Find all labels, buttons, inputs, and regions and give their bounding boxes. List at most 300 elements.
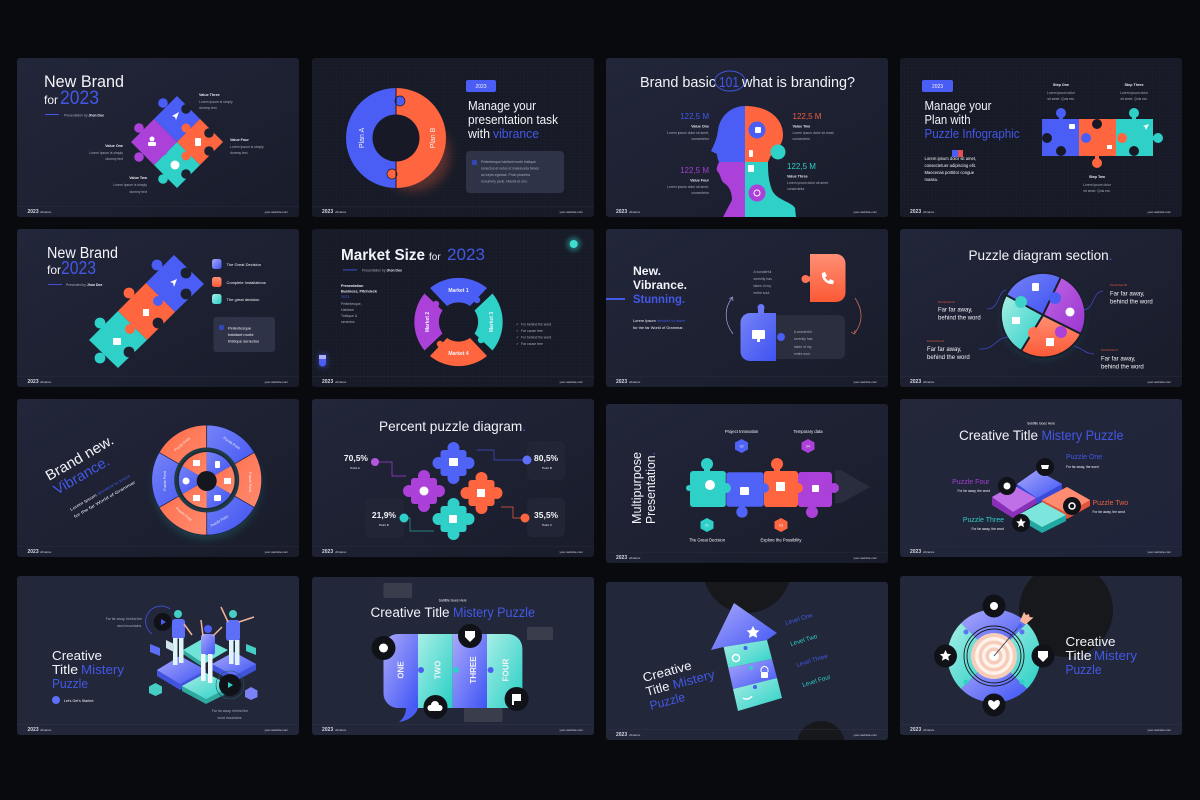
hexagon badges: 02 xyxy=(740,444,744,448)
rotated title: Vibrance. xyxy=(51,454,113,498)
title: what is branding? xyxy=(741,74,855,91)
connectors xyxy=(375,450,527,531)
footer: 2023 xyxy=(322,379,333,385)
checklist: For behind the word xyxy=(521,336,551,340)
callouts: Puzzle Point C xyxy=(1101,348,1118,352)
blue tag xyxy=(318,353,328,368)
title: for xyxy=(44,93,58,107)
text panel: Pellentesque xyxy=(228,326,252,330)
footer xyxy=(900,724,1182,733)
values: 122,5 M xyxy=(792,112,822,121)
title: Title xyxy=(52,663,78,677)
orange piece text: entire soul. xyxy=(754,291,770,295)
footer: 2023 xyxy=(322,549,333,555)
ring puzzle: Plan A xyxy=(359,128,366,148)
body text: for the far World of Grammar. xyxy=(633,325,684,330)
footer: vibrance xyxy=(629,380,641,384)
heading: Stunning. xyxy=(633,292,685,306)
step labels xyxy=(1047,83,1149,193)
checklist: ✓ xyxy=(516,342,519,346)
heading: Manage your xyxy=(924,98,992,113)
callouts: Far far away, xyxy=(927,347,962,353)
stats: Point B xyxy=(542,466,552,470)
callouts: Puzzle Point B xyxy=(1110,283,1127,287)
values: Lorem ipsum dolor sit amet, xyxy=(667,185,709,189)
footer: vibrance xyxy=(40,550,52,554)
market ring: Market 2 xyxy=(425,312,431,332)
callouts: Puzzle Point D xyxy=(927,339,944,343)
orange piece xyxy=(802,254,846,302)
values: consectetur xyxy=(691,191,710,195)
footer xyxy=(910,209,1171,215)
left text xyxy=(341,284,378,324)
footer: your-website.com xyxy=(264,210,288,214)
market ring: Market 1 xyxy=(448,288,469,294)
puzzle wheel: Puzzle Point xyxy=(248,472,252,492)
footer: vibrance xyxy=(629,733,641,737)
step labels: sit amet. Quis est. xyxy=(1047,97,1075,101)
slide 16: target wheel xyxy=(900,563,1182,735)
market ring: Market 3 xyxy=(489,312,495,332)
heading: Plan with xyxy=(924,112,970,127)
labels: Value One xyxy=(105,144,123,148)
footer: your-website.com xyxy=(559,210,583,214)
footer: vibrance xyxy=(335,210,347,214)
heading: Creative Title xyxy=(370,605,450,620)
rotated title: Multipurpose xyxy=(629,452,644,524)
footer: your-website.com xyxy=(1147,380,1171,384)
footer: 2023 xyxy=(322,209,333,215)
callouts xyxy=(927,283,1153,370)
arrow xyxy=(835,470,870,503)
badge xyxy=(922,80,953,92)
checklist: ✓ xyxy=(516,336,519,340)
level labels: Level Three xyxy=(796,653,829,669)
values: consectetur xyxy=(787,187,805,191)
footer: vibrance xyxy=(923,550,935,554)
heading xyxy=(370,598,535,620)
callouts: behind the word xyxy=(927,355,970,361)
isometric platform xyxy=(157,638,256,704)
labels: For far away, the word xyxy=(1066,465,1099,469)
footer xyxy=(17,206,299,215)
orange piece text xyxy=(754,270,772,295)
level labels xyxy=(785,612,832,689)
icon badges xyxy=(372,624,529,719)
heading xyxy=(467,98,558,141)
footer xyxy=(312,376,594,385)
footer: 2023 xyxy=(616,209,627,215)
footer: your-website.com xyxy=(264,728,288,732)
text panel: Pellentesque habitant morbi tristique xyxy=(481,160,536,164)
badge xyxy=(466,80,496,92)
values: Lorem ipsum dolor sit amet, xyxy=(667,131,709,135)
title: Puzzle diagram section. xyxy=(968,247,1112,263)
connectors xyxy=(979,290,1103,354)
left text: 2023 xyxy=(341,295,349,299)
jigsaw chain xyxy=(686,458,839,518)
speech puzzle: FOUR xyxy=(502,658,510,681)
footer: vibrance xyxy=(40,728,52,732)
icon badges xyxy=(998,458,1081,532)
step labels: Lorem ipsum dolor xyxy=(1120,91,1149,95)
slide 8: Puzzle diagram section xyxy=(900,229,1182,387)
slide 5: New Brand diagonal puzzle xyxy=(17,229,299,387)
step labels: sit amet. Quis est. xyxy=(1120,97,1148,101)
title xyxy=(47,245,118,278)
checklist: Far cause tree xyxy=(521,329,543,333)
heading: with xyxy=(467,126,490,141)
footer xyxy=(17,376,299,385)
body text: massa. xyxy=(924,177,938,182)
values: Lorem ipsum dolor sit amet, xyxy=(787,181,829,185)
footer xyxy=(606,552,888,561)
values: Value Four xyxy=(690,178,710,182)
step labels: Lorem ipsum dolor xyxy=(1047,91,1076,95)
slide 15: arrow levels xyxy=(606,582,888,740)
callout text: Far far away, behind the xyxy=(106,617,142,621)
body text: consectetuer adipiscing elit. xyxy=(924,163,976,168)
puzzle pieces xyxy=(403,442,502,540)
title: Brand basic xyxy=(640,74,716,91)
footer: 2023 xyxy=(616,379,627,385)
footer: 2023 xyxy=(910,379,921,385)
title xyxy=(640,71,855,91)
stats: Point A xyxy=(350,466,360,470)
labels xyxy=(689,429,823,542)
rotated title xyxy=(43,433,137,519)
labels: Explore the Possibility xyxy=(761,538,802,542)
presenter line xyxy=(45,114,104,118)
title: Puzzle xyxy=(52,677,88,691)
footer: vibrance xyxy=(629,210,641,214)
hexagon badges: 04 xyxy=(806,444,810,448)
orange piece text: taken of my xyxy=(754,284,771,288)
labels: Lorem Ipsum is simply xyxy=(199,100,233,104)
footer xyxy=(312,206,594,215)
footer xyxy=(900,376,1182,385)
slide 7: New. Vibrance. Stunning. xyxy=(606,229,888,387)
callouts: Far far away, xyxy=(1110,292,1145,298)
title: for xyxy=(429,252,441,263)
text panel: nonummy pede. Mauris et orci. xyxy=(481,180,528,184)
callouts: Far far away, xyxy=(1101,356,1136,362)
footer: your-website.com xyxy=(264,550,288,554)
values: 122,5 M xyxy=(680,166,709,175)
rotated title: Presentation. xyxy=(643,452,658,524)
stats: 35,5% xyxy=(534,510,559,520)
isometric puzzle xyxy=(992,470,1090,533)
title: for xyxy=(47,263,61,277)
footer xyxy=(312,724,594,733)
left text: senectus xyxy=(341,320,355,324)
labels: Puzzle Three xyxy=(963,517,1004,524)
rotated title xyxy=(629,452,658,524)
text panel: ac turpis egestas. Proin pharetra xyxy=(481,173,530,177)
market ring: Market 4 xyxy=(448,351,469,357)
footer: your-website.com xyxy=(1147,728,1171,732)
target wheel xyxy=(947,609,1041,703)
labels: Puzzle One xyxy=(1066,454,1102,461)
slide 3: Brand basic 101 head xyxy=(606,58,888,217)
icon badges xyxy=(934,594,1054,716)
presenter line xyxy=(48,283,102,287)
values: consectetur xyxy=(691,137,710,141)
slide 10: Percent puzzle diagram xyxy=(312,399,594,557)
heading: vibrance xyxy=(493,126,539,141)
footer: 2023 xyxy=(616,555,627,561)
labels: Lorem Ipsum is simply xyxy=(113,183,147,187)
presenter line: Presented by Jhon Doe xyxy=(66,283,102,287)
start link xyxy=(52,696,93,704)
blue piece panel: A wonderful xyxy=(794,330,812,334)
values: 122,5 M xyxy=(680,112,709,121)
heading xyxy=(959,422,1124,443)
labels: Value Two xyxy=(129,176,148,180)
values: consectetur xyxy=(792,137,811,141)
text panel xyxy=(214,317,275,352)
callout text: word mountains. xyxy=(218,716,242,720)
hexagon badges: 01 xyxy=(705,524,709,528)
left text: Habitant xyxy=(341,308,354,312)
values: Value Two xyxy=(792,124,811,128)
puzzle wheel: Puzzle Point xyxy=(222,436,241,450)
stats: Point C xyxy=(542,523,553,527)
footer: your-website.com xyxy=(559,728,583,732)
badge: 2023 xyxy=(475,84,487,90)
footer: vibrance xyxy=(629,556,641,560)
callouts: Puzzle Point A xyxy=(938,300,955,304)
people xyxy=(166,607,254,683)
labels: For far away, the word xyxy=(1092,510,1125,514)
footer: vibrance xyxy=(40,380,52,384)
checklist: Far cause tree xyxy=(521,342,543,346)
title: Puzzle xyxy=(1066,663,1102,677)
footer: 2023 xyxy=(910,209,921,215)
labels: dummy text xyxy=(230,151,248,155)
heading: Mistery Puzzle xyxy=(453,605,535,620)
arrow: left xyxy=(726,297,733,334)
rotated title: for the far World of Grammar xyxy=(73,479,137,519)
heading: New. xyxy=(633,264,661,278)
title xyxy=(44,72,124,109)
title xyxy=(52,649,125,691)
title: Creative xyxy=(52,649,102,663)
rotated title: Puzzle xyxy=(648,690,687,713)
footer: vibrance xyxy=(335,728,347,732)
labels: For far away, the word xyxy=(957,489,990,493)
badge: 2023 xyxy=(932,84,943,90)
slide 4: Manage your Plan with Puzzle Infographic xyxy=(900,58,1182,217)
puzzle wheel: Puzzle Point xyxy=(210,515,229,528)
body text xyxy=(633,318,685,330)
puzzle wheel: Puzzle Point xyxy=(175,506,192,522)
footer xyxy=(606,376,888,385)
rotated title: Lorem Ipsum decided to leave xyxy=(69,473,132,512)
labels: dummy text xyxy=(105,157,123,161)
body text xyxy=(924,150,976,182)
slide 6: Market Size ring xyxy=(312,229,594,387)
footer xyxy=(17,724,299,733)
text panel xyxy=(466,151,564,193)
footer: vibrance xyxy=(923,380,935,384)
callout text: word mountains. xyxy=(117,624,142,628)
text panel: habitant morbi xyxy=(228,332,253,337)
start link: Let's Get's Started xyxy=(64,699,93,703)
speech puzzle: TWO xyxy=(434,661,442,679)
title: Market Size xyxy=(341,247,425,264)
values: Value One xyxy=(691,124,709,128)
puzzle wheel: Puzzle Point xyxy=(174,436,191,452)
values: 122,5 M xyxy=(787,162,816,171)
heading: Puzzle Infographic xyxy=(924,126,1020,141)
slide 13: Creative Title with isometric people xyxy=(17,576,299,735)
presenter line: Presentation by Jhon Doe xyxy=(362,268,402,272)
arrow: right xyxy=(851,298,861,334)
callouts: Far far away, xyxy=(938,308,973,314)
checklist: For behind the word xyxy=(521,322,551,326)
title: Title xyxy=(1066,649,1092,663)
title: Mistery xyxy=(81,663,125,677)
labels: The Great Decision xyxy=(689,538,726,542)
speech puzzle: ONE xyxy=(396,661,406,679)
rotated title: Creative xyxy=(641,658,693,685)
checklist xyxy=(516,322,551,346)
labels: dummy text xyxy=(199,106,217,110)
values: Lorem ipsum dolor sit amet, xyxy=(792,131,834,135)
callouts: behind the word xyxy=(938,316,981,322)
values: Value Three xyxy=(787,174,808,178)
slide 9: Brand new wheel xyxy=(17,399,299,557)
dark circle xyxy=(1019,576,1113,657)
step labels: Step One xyxy=(1053,83,1069,87)
footer: 2023 xyxy=(28,209,39,215)
heading: Subtitle Goes Here xyxy=(1027,422,1055,426)
stats: 21,9% xyxy=(372,510,396,520)
body text: Maecenas porttitor congue xyxy=(924,170,975,175)
title: 2023 xyxy=(61,258,96,278)
blue piece panel: serenity has xyxy=(794,337,813,341)
slide 1: New Brand for 2023 diamond puzzle xyxy=(17,58,299,217)
stats xyxy=(344,453,559,527)
stats: 80,5% xyxy=(534,453,559,463)
chain puzzle xyxy=(1042,108,1163,168)
labels: Puzzle Four xyxy=(952,479,990,486)
teal dot xyxy=(567,237,581,251)
title: Percent puzzle diagram. xyxy=(379,418,526,434)
footer: your-website.com xyxy=(1147,550,1171,554)
rotated title: Mistery xyxy=(671,667,717,692)
title: New Brand xyxy=(47,245,118,262)
footer xyxy=(900,546,1182,555)
ring puzzle xyxy=(346,88,450,191)
stats: 70,5% xyxy=(344,453,368,463)
footer: vibrance xyxy=(923,728,935,732)
level labels: Level Four xyxy=(802,674,832,689)
checklist: Complete Installations xyxy=(226,280,266,285)
step labels: sit amet. Quis est. xyxy=(1083,189,1111,193)
footer: your-website.com xyxy=(853,210,877,214)
heading: Mistery Puzzle xyxy=(1042,428,1124,443)
checklist: ✓ xyxy=(516,329,519,333)
title: 101 xyxy=(719,74,739,91)
title xyxy=(1066,635,1138,677)
puzzle arrow xyxy=(711,603,782,711)
labels: Value Three xyxy=(199,93,220,97)
callout text xyxy=(106,617,248,720)
blue piece panel xyxy=(740,304,845,361)
labels: Project Innovation xyxy=(725,429,759,434)
labels xyxy=(89,93,264,194)
stat panels xyxy=(366,441,565,538)
labels: dummy text xyxy=(129,190,147,194)
step labels: Lorem ipsum dolor xyxy=(1083,183,1112,187)
checklist xyxy=(212,259,266,304)
slide 14: speech bubble puzzle xyxy=(312,577,594,735)
title: 2023 xyxy=(447,245,485,264)
heading xyxy=(924,98,1020,141)
footer: your-website.com xyxy=(1147,210,1171,214)
hexagon badges xyxy=(700,439,814,532)
dark circles xyxy=(705,582,844,740)
level labels: Level Two xyxy=(790,633,819,648)
callout text: Far far away, behind the xyxy=(212,709,248,713)
heading: Creative Title xyxy=(959,428,1038,443)
market ring xyxy=(414,278,503,366)
text panel: tristique senectus xyxy=(228,338,259,344)
step labels: Step Three xyxy=(1124,83,1144,87)
rotated title: Brand new. xyxy=(43,433,117,484)
orange piece text: serenity has xyxy=(754,277,772,281)
labels xyxy=(952,454,1128,531)
labels: Value Four xyxy=(230,138,249,142)
footer: 2023 xyxy=(28,549,39,555)
labels: Temporary data xyxy=(793,429,823,434)
footer: 2023 xyxy=(910,549,921,555)
checklist: The Great Decision xyxy=(226,262,261,267)
diagonal puzzle xyxy=(89,255,204,368)
blue piece panel: taken of my xyxy=(794,345,812,349)
footer xyxy=(606,729,888,738)
ring puzzle: Plan B xyxy=(430,127,437,148)
footer: vibrance xyxy=(335,550,347,554)
labels: For far away, the word xyxy=(971,527,1004,531)
footer: 2023 xyxy=(28,379,39,385)
level labels: Level One xyxy=(785,612,814,627)
footer xyxy=(17,546,299,555)
step labels: Step Two xyxy=(1089,175,1106,179)
slide 2: Plan A / Plan B ring xyxy=(312,58,594,217)
footer: 2023 xyxy=(616,732,627,738)
callouts: behind the word xyxy=(1110,300,1153,306)
floating cards and cubes xyxy=(149,644,258,700)
slide 12: Creative Title isometric puzzle xyxy=(900,399,1182,557)
heading: Subtitle Goes Here xyxy=(439,598,467,602)
head puzzle xyxy=(711,106,796,217)
play buttons xyxy=(146,606,244,699)
rotated title xyxy=(641,658,717,713)
left text: Tristique & xyxy=(341,314,358,318)
left text: Business, Pitchdeck xyxy=(341,290,378,294)
speech puzzle xyxy=(384,634,522,722)
footer: your-website.com xyxy=(264,380,288,384)
title: Creative xyxy=(1066,635,1116,649)
footer: your-website.com xyxy=(853,733,877,737)
footer: vibrance xyxy=(335,380,347,384)
round puzzle xyxy=(1001,273,1085,358)
puzzle wheel xyxy=(152,425,262,538)
faint chat bubbles xyxy=(384,583,553,722)
